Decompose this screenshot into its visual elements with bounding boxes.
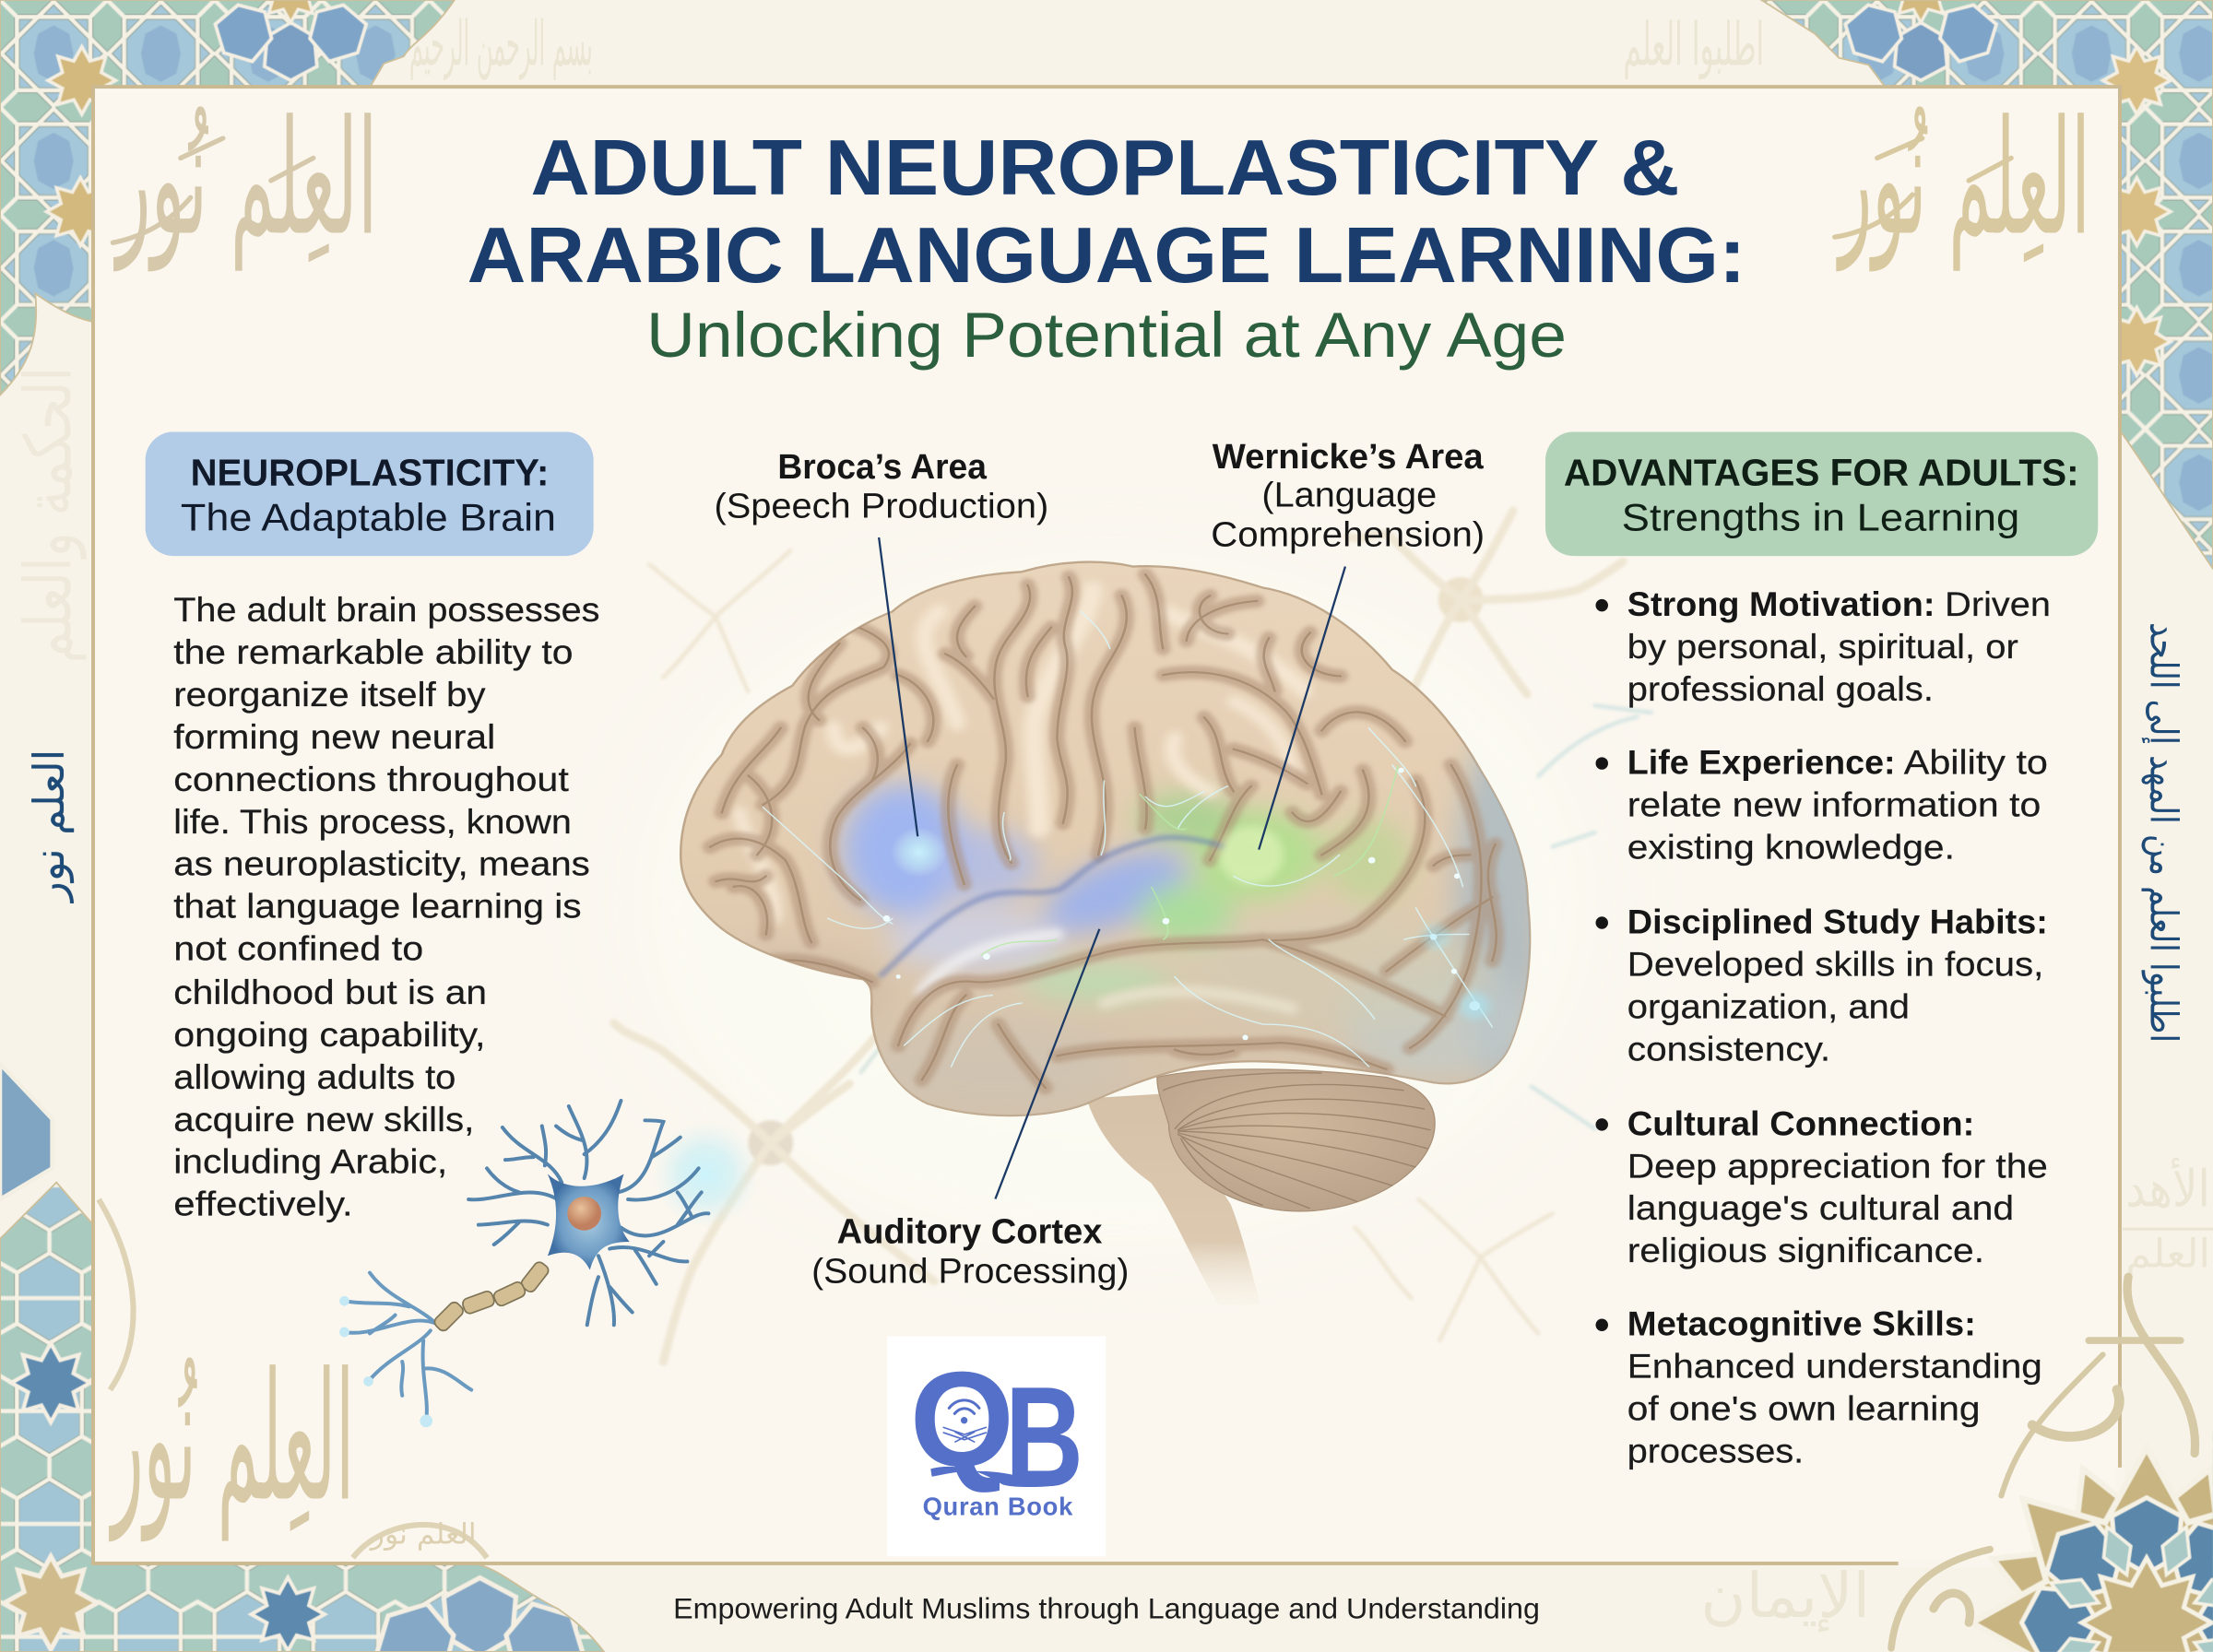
list item: disciplined study habits: consistency.	[1627, 1029, 1830, 1068]
text block: neuroplasticity description: ongoing capability,	[173, 1015, 486, 1054]
corner ornament: top right geometric pattern	[1761, 0, 2213, 569]
list item: strong motivation	[1596, 584, 2051, 708]
calligraphy: top right	[1835, 88, 2090, 272]
text block: neuroplasticity description: forming new neural	[173, 717, 495, 756]
ghost calligraphy: top and margins: الحكمة والعلم	[11, 367, 88, 663]
side text: right vertical Arabic: اطلبوا العلم من المهد إلى اللحد	[2142, 622, 2186, 1043]
calligraphy: top left	[112, 88, 377, 272]
side text: left vertical Arabic: العلم نور	[24, 749, 75, 903]
background neurons (faded)	[537, 479, 1694, 1362]
list item: disciplined study habits: Developed skills in focus,	[1627, 944, 2043, 983]
list item: metacognitive skills	[1596, 1304, 2042, 1469]
panel: advantages heading	[1545, 431, 2098, 556]
infographic canvas: العِلم نُور	[113, 88, 377, 272]
title	[467, 124, 1746, 371]
ghost calligraphy: top and margins: اطلبوا العلم	[1623, 10, 1764, 79]
calligraphy: bottom left	[99, 1199, 487, 1558]
ghost calligraphy: top and margins: العلم	[2125, 1231, 2210, 1277]
label: Wernicke's area	[1211, 437, 1485, 554]
list item: cultural connection	[1596, 1103, 2048, 1269]
text block: neuroplasticity description: not confined to	[173, 929, 423, 968]
list item: life experience: existing knowledge.	[1627, 827, 1955, 866]
list item: disciplined study habits: Disciplined Study Habits:	[1627, 903, 2048, 941]
neural sparks	[763, 611, 1492, 1067]
list item: strong motivation: by personal, spiritual, or	[1627, 627, 2018, 666]
title: ARABIC LANGUAGE LEARNING:	[467, 211, 1746, 300]
cerebellum	[1157, 1069, 1435, 1211]
label: Broca's area: (Speech Production)	[714, 487, 1048, 526]
text block: neuroplasticity description: connections throughout	[173, 760, 569, 798]
frame gap at bottom right corner	[1899, 1468, 2124, 1568]
panel: advantages heading: Strengths in Learning	[1622, 497, 2019, 539]
label: Broca's area	[714, 447, 1048, 526]
text block: neuroplasticity description: The adult brain possesses	[173, 590, 600, 629]
text block: neuroplasticity description: the remarkable ability to	[173, 632, 573, 671]
logo: Quran Book: B	[1005, 1357, 1083, 1516]
corner ornament: bottom right rosette	[1947, 1433, 2213, 1652]
list item: disciplined study habits: organization, and	[1627, 986, 1910, 1025]
list item: life experience: Life Experience:	[1627, 743, 1896, 782]
footer tagline: Empowering Adult Muslims through Language and Understanding	[673, 1593, 1540, 1625]
text block: neuroplasticity description: including Arabic,	[173, 1142, 447, 1181]
list item: strong motivation: professional goals.	[1627, 669, 1934, 708]
list item: strong motivation: Strong Motivation:	[1627, 584, 1935, 623]
text block: neuroplasticity description: effectively.	[173, 1185, 353, 1223]
label: Wernicke's area: (Language	[1261, 475, 1437, 514]
list item: cultural connection: language's cultural and	[1627, 1188, 2014, 1227]
list item: life experience	[1596, 743, 2048, 866]
title: Unlocking Potential at Any Age	[646, 300, 1567, 371]
text block: neuroplasticity description: reorganize itself by	[173, 675, 486, 714]
list item: cultural connection: Deep appreciation for the	[1627, 1146, 2048, 1185]
fold lines	[710, 574, 1497, 1088]
fold shadows	[710, 574, 1497, 1088]
panel: neuroplasticity heading	[146, 431, 594, 556]
gyri highlights	[740, 590, 1304, 1009]
glow core: Wernicke	[1219, 826, 1284, 884]
list item: life experience: Ability to	[1904, 743, 2048, 782]
callout line: Broca's area	[879, 537, 917, 836]
calligraphy: bottom right flourish	[1891, 1277, 2195, 1648]
ghost calligraphy: top and margins: الإيمان	[1700, 1559, 1870, 1633]
text block: neuroplasticity description: childhood but is an	[173, 973, 487, 1011]
text block: neuroplasticity description	[173, 590, 600, 1223]
text block: neuroplasticity description: allowing adults to	[173, 1057, 456, 1096]
list item: metacognitive skills: processes.	[1627, 1431, 1804, 1469]
list item: metacognitive skills: of one's own learning	[1627, 1389, 1980, 1428]
list item: metacognitive skills: Enhanced understanding	[1627, 1347, 2042, 1386]
callout line: Wernicke's area	[1259, 567, 1345, 850]
calligraphy: bottom left: العلم نور	[369, 1518, 477, 1551]
callout line: auditory cortex	[995, 929, 1099, 1198]
label: auditory cortex: Auditory Cortex	[837, 1211, 1102, 1251]
text block: neuroplasticity description: acquire new skills,	[173, 1100, 474, 1139]
text block: neuroplasticity description: that language learning is	[173, 887, 582, 926]
list item: cultural connection: Cultural Connection:	[1627, 1103, 1974, 1142]
icon: neuron	[339, 1101, 759, 1427]
list item: life experience: relate new information to	[1627, 785, 2041, 823]
label: Wernicke's area: Comprehension)	[1211, 514, 1485, 554]
glow core: Broca	[894, 830, 944, 875]
list item: metacognitive skills: Metacognitive Skills:	[1627, 1304, 1976, 1343]
brain illustration	[680, 537, 1543, 1304]
panel: neuroplasticity heading: The Adaptable Brain	[181, 497, 556, 539]
list item: disciplined study habits	[1596, 903, 2048, 1068]
label: auditory cortex	[811, 1211, 1129, 1291]
label: Wernicke's area: Wernicke’s Area	[1213, 437, 1484, 477]
logo: Quran Book: Q	[910, 1344, 1014, 1495]
panel: advantages heading: ADVANTAGES FOR ADULTS:	[1564, 452, 2079, 494]
brain stem	[1086, 1093, 1260, 1304]
logo: Quran Book: Quran Book	[923, 1492, 1073, 1520]
logo: Quran Book	[887, 1336, 1106, 1556]
cerebrum	[680, 562, 1530, 1115]
calligraphy: bottom left: العِلم نُور	[109, 1336, 354, 1542]
corner ornament: bottom left geometric pattern	[0, 1183, 604, 1652]
text block: neuroplasticity description: life. This process, known	[173, 802, 572, 841]
label: auditory cortex: (Sound Processing)	[811, 1251, 1129, 1291]
label: Broca's area: Broca’s Area	[777, 447, 988, 487]
shading	[834, 749, 1530, 1115]
list item: cultural connection: religious significance.	[1627, 1231, 1984, 1269]
list item: strong motivation: Driven	[1945, 584, 2051, 623]
ghost calligraphy: top and margins: بسم الرحمن الرحيم	[409, 6, 593, 80]
corner ornament: top left geometric pattern	[0, 0, 455, 395]
text block: neuroplasticity description: as neuroplasticity, means	[173, 844, 590, 883]
corner ornament: left margin fragment	[0, 1064, 53, 1199]
lateral fissure	[880, 837, 1225, 976]
title: ADULT NEUROPLASTICITY &	[531, 124, 1679, 212]
panel: neuroplasticity heading: NEUROPLASTICITY:	[191, 452, 549, 494]
